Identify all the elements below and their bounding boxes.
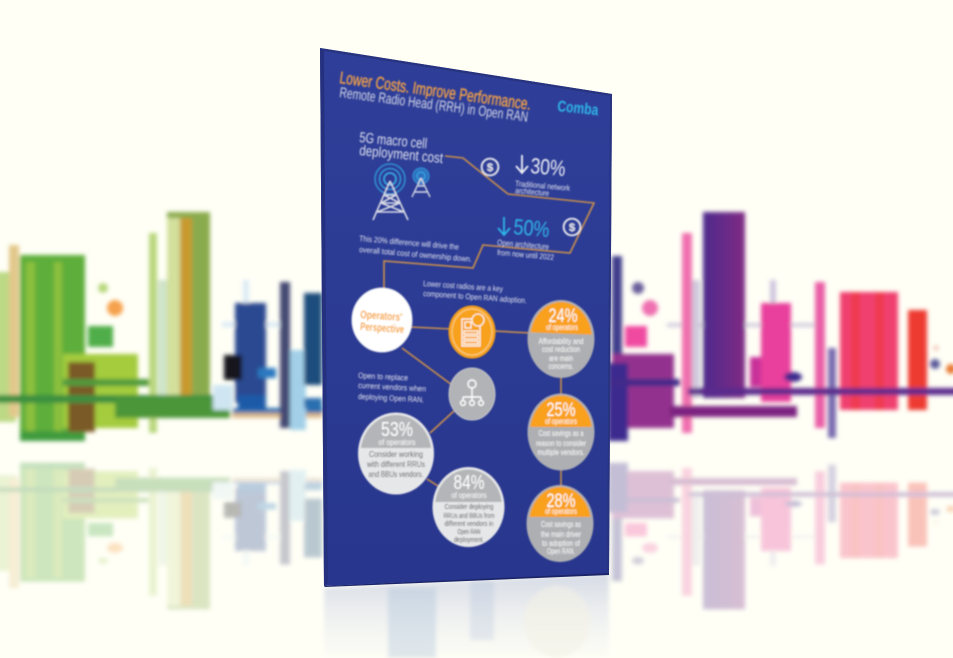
icon: dollar circle 1: $ bbox=[487, 162, 493, 174]
stat circle: 28%: the main driver bbox=[541, 530, 581, 539]
icon: dollar circle 1 bbox=[482, 158, 498, 176]
stat circle: 25%: multiple vendors. bbox=[538, 448, 584, 457]
stat circle: 53%: of operators bbox=[378, 438, 416, 447]
infographic panel bbox=[320, 48, 612, 587]
icon: orange calculator bbox=[449, 306, 495, 358]
circle: operators' perspective bbox=[352, 288, 412, 352]
icon: small tower bbox=[412, 168, 430, 197]
stat: down 30%: Traditional network bbox=[515, 179, 571, 193]
stat circle: 24% bbox=[528, 300, 594, 378]
stat circle: 24%: concerns. bbox=[548, 362, 574, 371]
text: 20% difference bbox=[359, 234, 472, 264]
stat: down 30% bbox=[515, 153, 571, 198]
stat circle: 24%: cost reduction bbox=[542, 345, 580, 354]
stat circle: 25% bbox=[528, 394, 594, 470]
stat circle: 53%: and BBUs vendors. bbox=[368, 469, 424, 479]
stat circle: 24%: Affordability and bbox=[538, 337, 584, 346]
text: lower cost radios bbox=[423, 279, 527, 305]
text: 20% difference: overall total cost of ownership down. bbox=[359, 245, 472, 264]
stat: down 50%: from now until 2022 bbox=[497, 248, 555, 262]
stat: down 50%: Open architecture bbox=[497, 238, 550, 252]
stat circle: 28%: Open RAN. bbox=[547, 547, 575, 556]
icon: org chart bbox=[449, 368, 495, 420]
text: open to replace: Open to replace bbox=[358, 371, 409, 383]
text: lower cost radios: Lower cost radios are a key bbox=[423, 279, 503, 294]
title: Lower Costs. Improve Performance. bbox=[338, 68, 532, 114]
stat circle: 53% bbox=[358, 412, 434, 494]
panel board bbox=[320, 48, 612, 587]
stat circle: 84%: deployment. bbox=[454, 537, 484, 544]
stat circle: 25%: of operators bbox=[545, 417, 577, 426]
circle: operators' perspective: Perspective bbox=[360, 321, 405, 336]
stat circle: 24%: of operators bbox=[546, 323, 578, 332]
logo: Comba: Comba bbox=[557, 98, 599, 119]
stat circle: 24%: 24% bbox=[548, 306, 578, 327]
icon: dollar circle 2 bbox=[564, 218, 580, 236]
stat circle: 84%: different vendors in bbox=[444, 521, 494, 528]
stat circle: 24%: are main bbox=[549, 354, 573, 363]
stat: down 50%: 50% bbox=[513, 214, 551, 242]
text: 20% difference: This 20% difference will drive the bbox=[359, 234, 460, 252]
text: open to replace: deploying Open RAN. bbox=[358, 392, 424, 404]
stat circle: 28% bbox=[526, 485, 594, 562]
panel reflection bbox=[324, 574, 609, 658]
city skyline reflection bbox=[0, 463, 953, 609]
stat circle: 84%: Consider deploying bbox=[444, 504, 494, 511]
stat circle: 28%: 28% bbox=[546, 491, 576, 512]
text: open to replace bbox=[358, 371, 426, 404]
stat: down 30%: architecture bbox=[515, 186, 550, 198]
stat circle: 84%: of operators bbox=[452, 491, 486, 500]
title: Remote Radio Head (RRH) in Open RAN bbox=[338, 85, 529, 126]
heading: 5G macro cell deployment cost: deployment cost bbox=[359, 143, 444, 167]
heading: 5G macro cell deployment cost: 5G macro cell bbox=[359, 130, 428, 152]
stat circle: 84%: 84% bbox=[454, 472, 485, 494]
stat circle: 28%: Cost savings as bbox=[541, 520, 581, 529]
stat circle: 28%: of operators bbox=[545, 507, 577, 516]
stat circle: 84% bbox=[432, 467, 504, 547]
city skyline bbox=[0, 212, 953, 441]
stat circle: 84%: RRUs and BBUs from bbox=[444, 513, 495, 520]
icon: dollar circle 2: $ bbox=[569, 222, 575, 234]
stat circle: 28%: to adoption of bbox=[542, 539, 581, 548]
stat circle: 25%: Cost savings as a bbox=[538, 429, 584, 438]
stat circle: 53%: Consider working bbox=[369, 449, 423, 459]
stat: down 30%: 30% bbox=[530, 153, 567, 181]
heading: 5G macro cell deployment cost bbox=[359, 130, 444, 167]
circle: operators' perspective: Operators' bbox=[360, 309, 403, 324]
connector lines bbox=[384, 156, 594, 486]
icon: large tower bbox=[373, 164, 408, 220]
stat circle: 25%: reason to consider bbox=[536, 439, 586, 448]
stat: down 50% bbox=[497, 214, 555, 262]
text: open to replace: current vendors when bbox=[358, 381, 426, 394]
stat circle: 84%: Open RAN bbox=[458, 529, 480, 536]
stat circle: 53%: 53% bbox=[381, 419, 413, 441]
text: lower cost radios: component to Open RAN adoption. bbox=[423, 289, 527, 305]
stat circle: 53%: with different RRUs bbox=[366, 459, 425, 469]
stat circle: 25%: 25% bbox=[546, 400, 576, 421]
